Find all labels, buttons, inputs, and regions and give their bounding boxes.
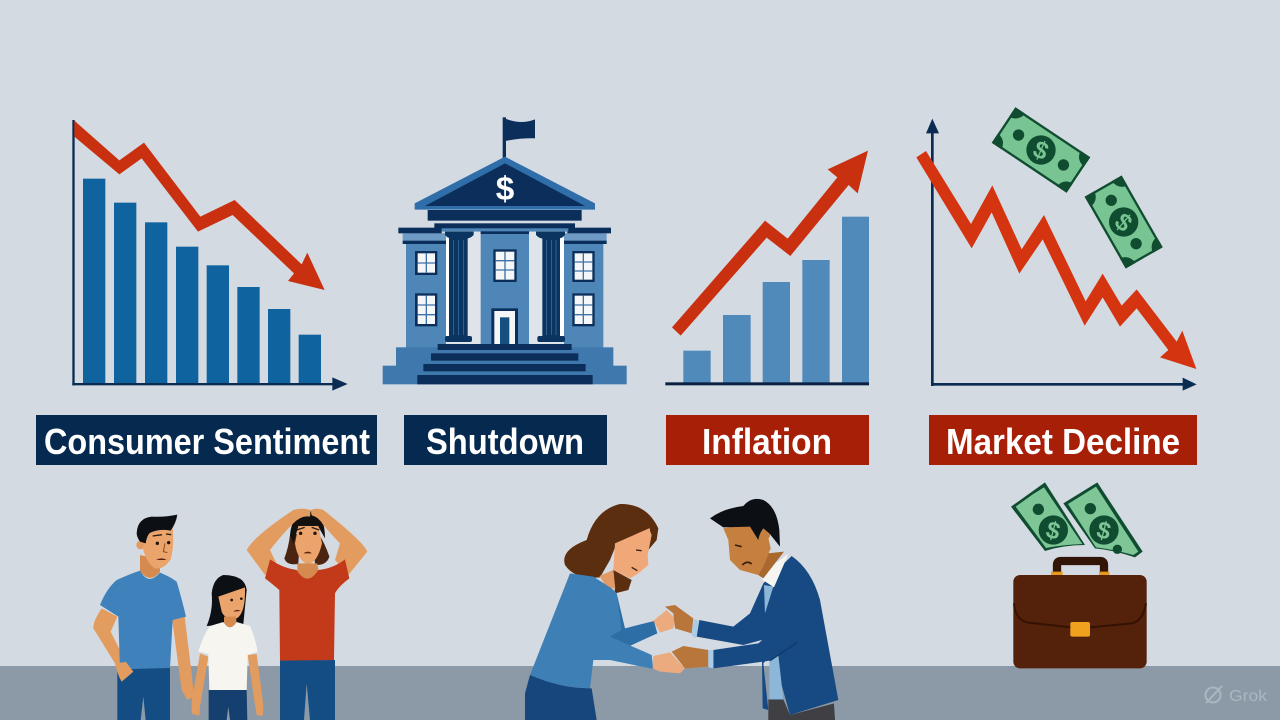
icon: government building with dollar sign <box>383 117 627 384</box>
red falling zigzag arrow <box>916 151 1196 369</box>
wings and centre bay <box>403 231 607 348</box>
flag <box>503 117 535 159</box>
mother <box>247 509 367 720</box>
chart: consumer sentiment falling bars <box>72 120 348 391</box>
woman <box>525 504 685 720</box>
flap line <box>1014 603 1146 628</box>
windows <box>415 249 595 326</box>
label: Market Decline: Market Decline <box>946 421 1180 462</box>
clasp <box>1070 622 1090 637</box>
axes <box>72 120 348 391</box>
baseline <box>665 382 869 385</box>
handle <box>1057 561 1104 574</box>
watermark: Grok <box>1206 686 1268 705</box>
label: Inflation <box>666 415 869 465</box>
father <box>93 515 194 720</box>
falling bill 2 <box>1085 176 1163 268</box>
bills rising from case <box>1011 482 1143 557</box>
man <box>665 499 838 720</box>
illustration: worried family <box>93 509 367 720</box>
entablature <box>398 210 611 233</box>
illustration: two people clasping hands <box>525 499 838 720</box>
columns <box>445 232 565 342</box>
child <box>192 575 263 720</box>
roof pediment <box>415 157 595 210</box>
label: Consumer Sentiment: Consumer Sentiment <box>44 421 370 462</box>
label: Shutdown: Shutdown <box>426 421 584 462</box>
watermark: Grok: Grok <box>1229 688 1268 705</box>
falling bill 1 <box>992 107 1090 193</box>
column flutes <box>453 240 556 335</box>
falling bill 1: $ <box>1029 136 1052 166</box>
bars <box>683 217 869 383</box>
roof pediment: $ <box>496 171 515 208</box>
axes <box>926 119 1197 391</box>
stairs <box>383 344 627 384</box>
hinges <box>1051 572 1109 575</box>
door <box>491 308 518 345</box>
red rising arrow <box>672 151 868 336</box>
falling bill 2: $ <box>1109 208 1137 238</box>
case <box>1013 575 1147 668</box>
label: Inflation: Inflation <box>702 421 832 462</box>
bars <box>83 179 321 384</box>
chart: market decline with falling bills <box>916 107 1197 391</box>
illustration: briefcase with money <box>1011 482 1147 668</box>
bills rising from case: $ <box>1094 516 1114 546</box>
floor band <box>0 666 1280 720</box>
red falling arrow <box>74 121 325 290</box>
bills rising from case: $ <box>1043 516 1063 546</box>
chart: inflation rising bars <box>665 151 869 385</box>
